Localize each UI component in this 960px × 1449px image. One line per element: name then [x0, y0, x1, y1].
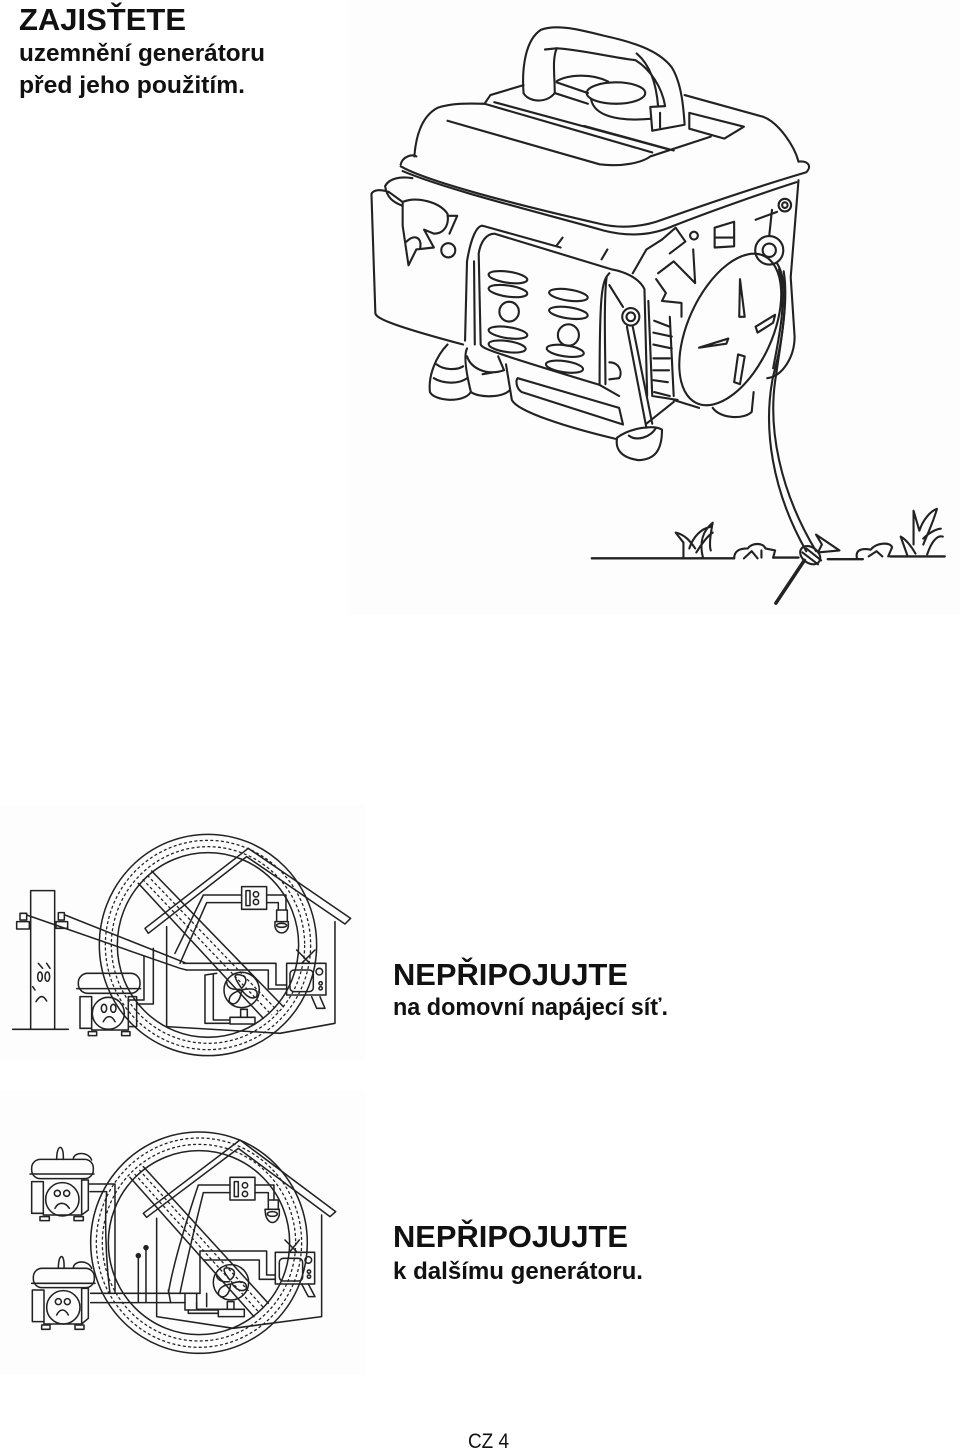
ground wire — [769, 263, 806, 551]
generator: upper — [30, 1147, 94, 1221]
heading: ground the generator: uzemnění generátoru — [19, 40, 265, 67]
heading: ground the generator — [19, 1, 265, 99]
television — [287, 963, 326, 995]
text: do not connect to another generator — [393, 1218, 643, 1285]
text: do not connect to mains: NEPŘIPOJUJTE — [393, 956, 628, 992]
generator: lower — [32, 1257, 95, 1329]
fan — [224, 972, 259, 1008]
prohibition ring — [99, 834, 317, 1056]
illustration: do not connect to mains — [13, 834, 351, 1056]
base and feet — [506, 362, 623, 439]
wiring — [88, 1184, 200, 1303]
switch box and lamp — [175, 895, 286, 963]
text: do not connect to mains — [393, 956, 668, 1021]
heading: ground the generator: před jeho použitím. — [19, 72, 245, 99]
heading: ground the generator: ZAJISŤETE — [19, 1, 186, 37]
illustration: do not connect to another generator — [30, 1132, 336, 1353]
ground, rocks, grass and peg — [592, 556, 945, 559]
engine details — [633, 228, 695, 317]
text: do not connect to another generator: k dalšímu generátoru. — [393, 1258, 643, 1285]
house — [145, 848, 351, 1033]
illustration: grounded generator — [371, 27, 945, 603]
recoil cover — [658, 238, 802, 421]
house — [143, 1140, 336, 1328]
television — [275, 1252, 315, 1284]
small generator — [78, 973, 140, 993]
fuel tank — [371, 177, 463, 345]
engine cover — [465, 226, 561, 345]
text: do not connect to mains: na domovní napájecí síť. — [393, 994, 668, 1021]
fan — [213, 1265, 249, 1300]
text: do not connect to another generator: NEPŘIPOJUJTE — [393, 1218, 628, 1254]
utility pole — [13, 891, 68, 1029]
prohibition ring — [91, 1132, 307, 1353]
